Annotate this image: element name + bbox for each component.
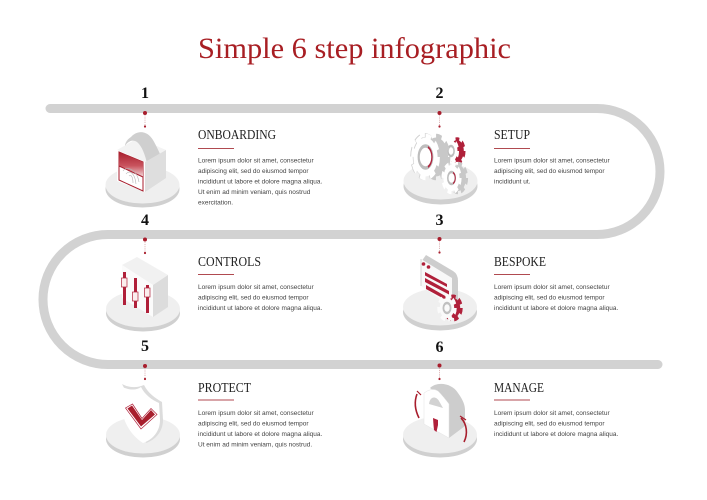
step 4: controls	[106, 212, 323, 332]
number 3: 3	[436, 212, 444, 229]
body text: adipiscing elit, sed do eiusmod tempor	[198, 168, 309, 175]
heading setup: SETUP	[494, 127, 530, 142]
number 4: 4	[141, 212, 149, 229]
number 2: 2	[436, 85, 444, 102]
body text: adipiscing elit, sed do eiusmod tempor	[494, 420, 605, 428]
body text: Lorem ipsum dolor sit amet, consectetur	[198, 410, 314, 417]
body text: Lorem ipsum dolor sit amet, consectetur	[494, 158, 610, 164]
title: Simple 6 step infographic	[198, 32, 511, 65]
number 6: 6	[436, 339, 444, 356]
connector 5	[143, 364, 147, 380]
icon: sliders	[106, 257, 180, 332]
body text: adipiscing elit, sed do eiusmod tempor	[494, 168, 605, 175]
rule	[198, 400, 234, 401]
body text: incididunt ut labore et dolore magna aliqua.	[494, 431, 619, 438]
icon: shield with check	[106, 384, 180, 458]
rule	[494, 274, 530, 275]
rule	[198, 274, 234, 275]
number 5: 5	[141, 338, 149, 355]
rule	[198, 148, 234, 149]
connector 4	[143, 238, 147, 254]
step 2: setup	[404, 85, 610, 204]
connector 2	[438, 111, 442, 128]
step 6: manage	[403, 339, 619, 458]
connector 3	[438, 237, 442, 254]
body text: Lorem ipsum dolor sit amet, consectetur	[198, 284, 314, 291]
rule	[494, 400, 530, 401]
heading bespoke: BESPOKE	[494, 254, 546, 269]
step 3: bespoke	[403, 212, 619, 330]
body text: adipiscing elit, sed do eiusmod tempor	[198, 294, 309, 302]
step 1: onboarding	[106, 85, 323, 208]
heading manage: MANAGE	[494, 380, 544, 395]
icon: gears	[404, 136, 478, 204]
body text: Lorem ipsum dolor sit amet, consectetur	[494, 284, 610, 291]
body text: exercitation.	[198, 200, 233, 206]
body text: Ut enim ad minim veniam, quis nostrud.	[198, 442, 312, 448]
rule	[494, 148, 530, 149]
body text: adipiscing elit, sed do eiusmod tempor	[198, 420, 309, 428]
icon: fingerprint padlock	[106, 132, 180, 208]
body text: Lorem ipsum dolor sit amet, consectetur	[198, 158, 314, 164]
connector 6	[438, 364, 442, 380]
body text: Lorem ipsum dolor sit amet, consectetur	[494, 410, 610, 417]
heading protect: PROTECT	[198, 380, 252, 395]
icon: padlock with arrows	[403, 384, 477, 458]
body text: adipiscing elit, sed do eiusmod tempor	[494, 294, 605, 302]
step 5: protect	[106, 338, 323, 458]
heading controls: CONTROLS	[198, 254, 261, 269]
body text: incididunt ut labore et dolore magna aliqua.	[198, 431, 323, 438]
icon: browser window with gear	[403, 255, 477, 330]
body text: incididunt ut.	[494, 178, 531, 186]
body text: Ut enim ad minim veniam, quis nostrud	[198, 189, 311, 196]
body text: incididunt ut labore et dolore magna aliqua.	[198, 305, 323, 312]
heading onboarding: ONBOARDING	[198, 127, 276, 142]
body text: incididunt ut labore et dolore magna aliqua.	[198, 178, 323, 186]
connector 1	[143, 111, 147, 128]
number 1: 1	[141, 85, 149, 102]
body text: incididunt ut labore et dolore magna aliqua.	[494, 305, 619, 312]
winding path track	[43, 108, 660, 364]
